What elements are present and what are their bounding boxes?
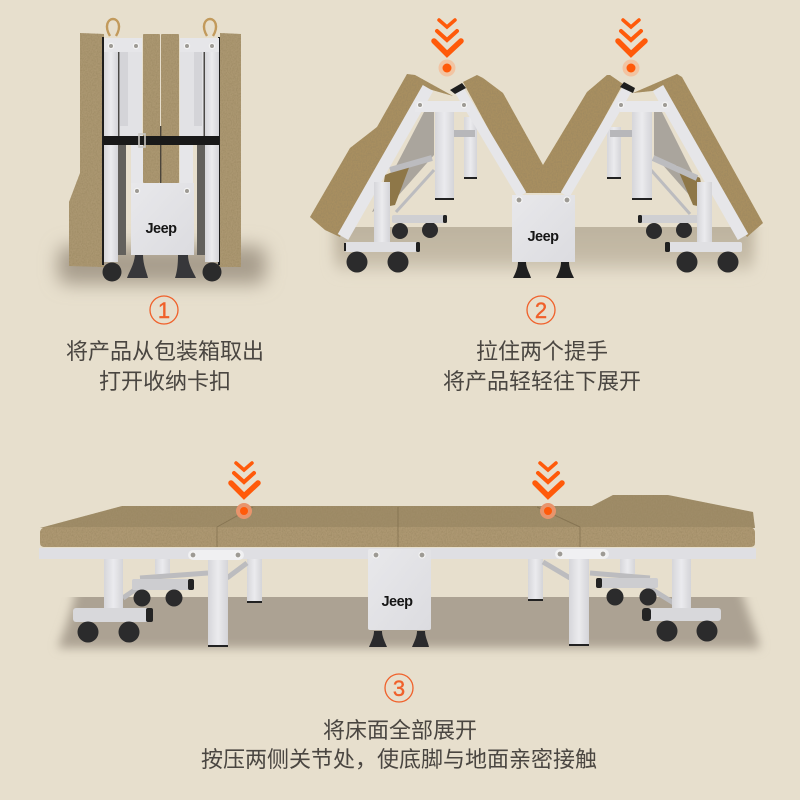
product step 3: fully unfolded bed <box>39 495 760 648</box>
mattress top surface <box>40 495 755 528</box>
floor shadow step 2 <box>329 227 759 274</box>
step 3 number: 3 <box>393 676 405 701</box>
arrow: press left joint, step 2 <box>434 20 461 76</box>
Jeep plate <box>512 195 575 262</box>
front casters <box>346 252 738 272</box>
feet <box>369 631 429 647</box>
mattress seams <box>217 507 580 547</box>
floor shadow step 3 <box>55 597 764 654</box>
rear legs <box>155 559 635 603</box>
step 2 caption <box>443 339 641 394</box>
step 2 number: 2 <box>535 298 547 323</box>
right casters and braces <box>543 559 721 642</box>
strap with buckle <box>103 134 219 147</box>
step 1 number: 1 <box>158 298 170 323</box>
right frame <box>565 82 743 252</box>
step 2 caption: 将产品轻轻往下展开 <box>443 369 641 394</box>
Jeep plate <box>368 549 431 630</box>
left frame <box>343 83 522 252</box>
main rail <box>39 548 756 559</box>
step 3 caption <box>201 718 597 772</box>
fabric cushions <box>69 33 241 267</box>
rear casters <box>392 215 698 239</box>
feet <box>513 262 574 278</box>
arrow: press right joint, step 2 <box>618 20 645 76</box>
step 2 number <box>527 296 555 324</box>
step 3 caption: 将床面全部展开 <box>323 718 477 743</box>
step 3 number <box>385 674 413 702</box>
left casters and braces <box>73 559 247 642</box>
arrow: press right joint, step 3 <box>535 463 562 519</box>
arrow: press left joint, step 3 <box>231 463 258 519</box>
product step 2: half unfolded bed <box>310 74 763 278</box>
front legs <box>208 559 589 647</box>
fabric cushions M shape <box>310 74 763 237</box>
feet and wheels <box>102 255 222 282</box>
joint plates <box>188 549 609 560</box>
Jeep plate: Jeep <box>381 594 413 610</box>
Jeep plate: Jeep <box>527 229 559 245</box>
step 1 caption: 打开收纳卡扣 <box>99 369 231 394</box>
product step 1: folded bed front view <box>58 19 266 284</box>
step 2 caption: 拉住两个提手 <box>476 339 608 364</box>
Jeep plate: Jeep <box>145 221 177 237</box>
step 1 caption: 将产品从包装箱取出 <box>66 339 264 364</box>
step 1 caption <box>66 339 264 394</box>
carry handles <box>107 19 216 36</box>
floor shadow step 1 <box>58 246 266 284</box>
step 3 caption: 按压两侧关节处，使底脚与地面亲密接触 <box>201 747 597 772</box>
Jeep plate <box>131 183 194 255</box>
step 1 number <box>150 296 178 324</box>
folded frame <box>102 37 220 265</box>
mattress front face <box>40 527 755 547</box>
rear legs and braces <box>372 112 712 214</box>
